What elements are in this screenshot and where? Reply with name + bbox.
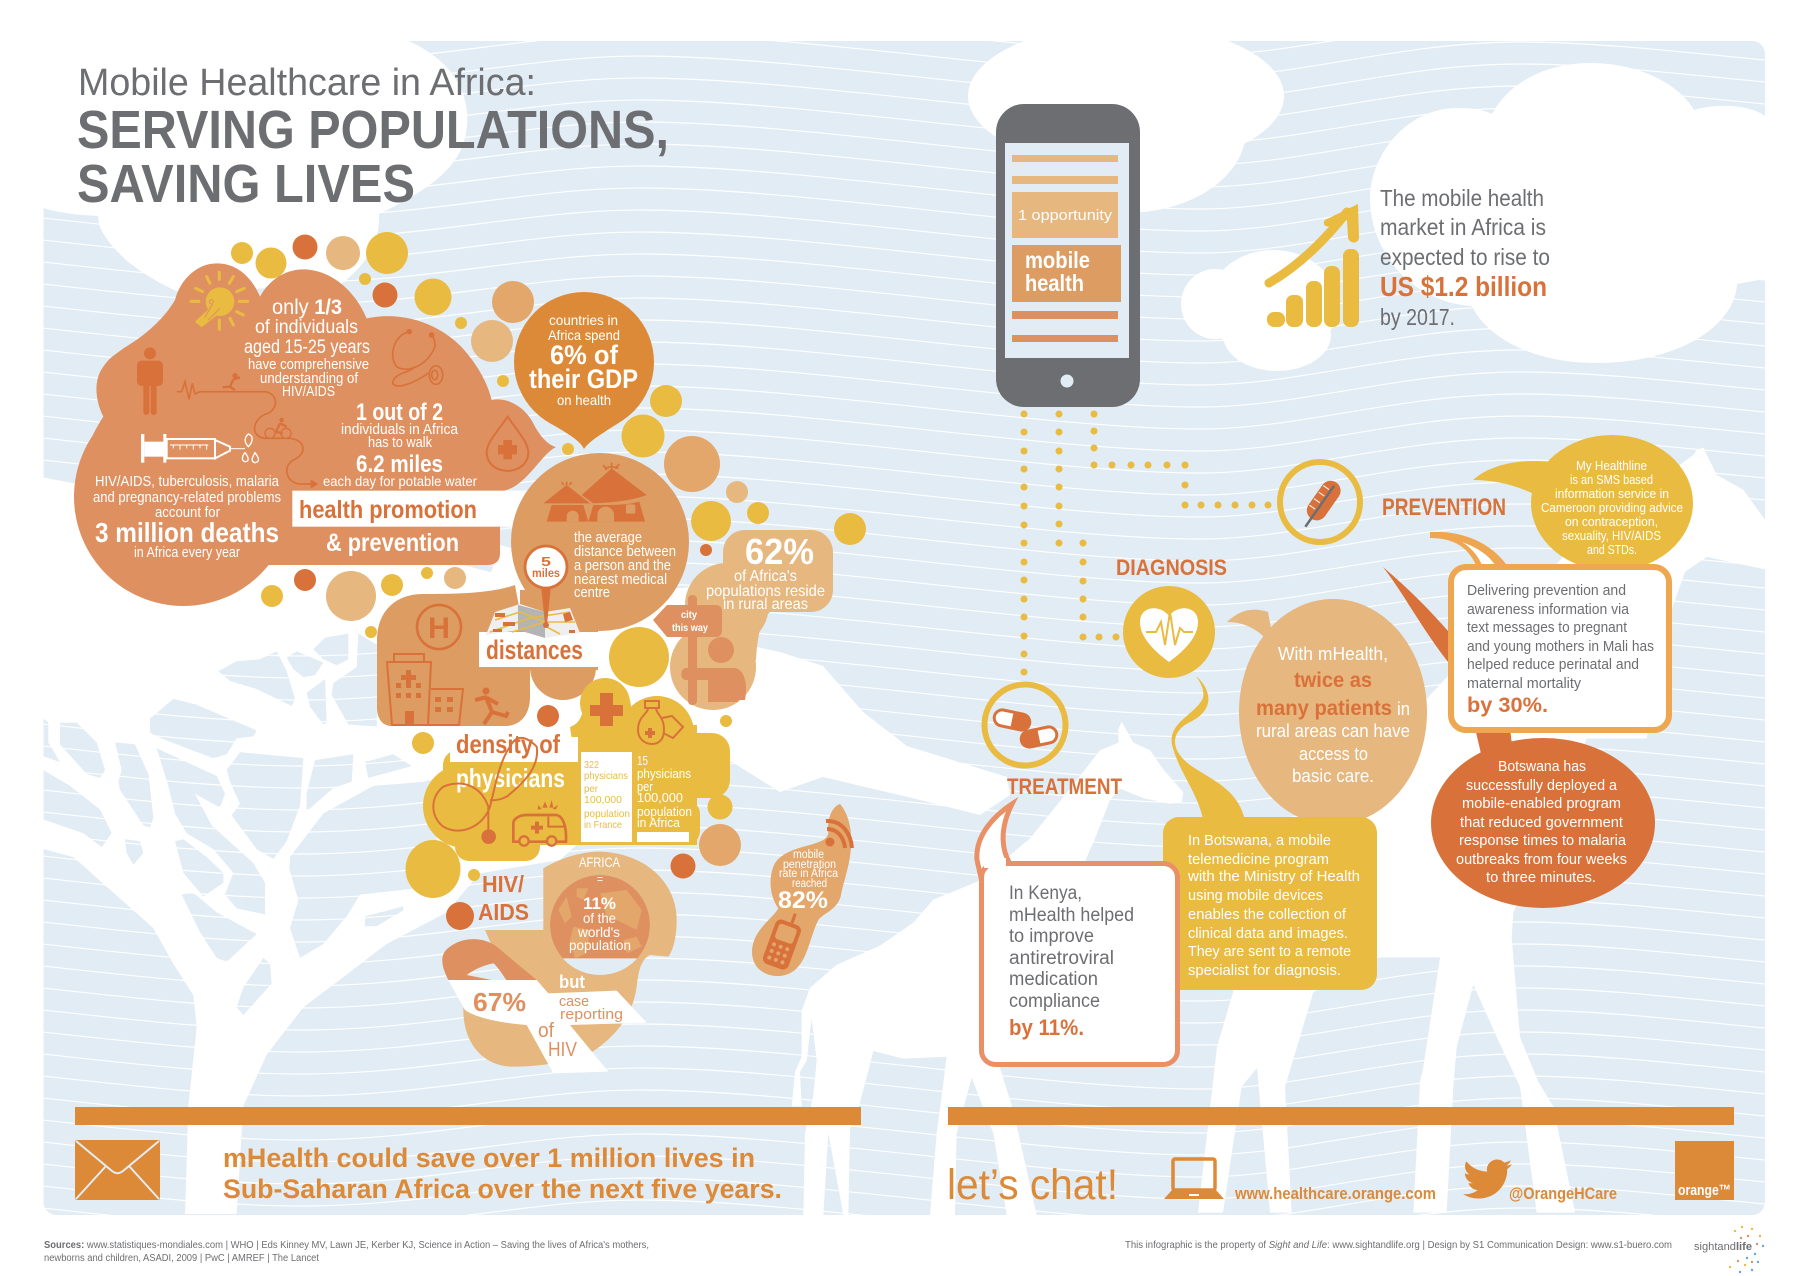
callout: twice as many patients: twice as <box>1294 669 1372 692</box>
stat: 322 physicians in France: 100,000 <box>584 794 622 806</box>
title <box>77 62 669 214</box>
icon: ambulance <box>513 800 566 846</box>
callout: twice as many patients <box>1227 599 1427 825</box>
panel: distances lobe <box>377 453 689 726</box>
text: 67 percent of HIV case reporting: 67% <box>473 987 526 1017</box>
label: mobile health: mobile <box>1025 247 1090 273</box>
stat: 15 physicians in Africa: population <box>637 805 692 819</box>
panel: mobile penetration <box>752 804 852 976</box>
icon: smartphone <box>996 104 1140 407</box>
callout: Mali prevention box: and young mothers in Mali has <box>1467 638 1654 655</box>
callout: My Healthline: sexuality, HIV/AIDS <box>1562 529 1661 543</box>
icon: hospital building <box>387 654 463 725</box>
text: market forecast: expected to rise to <box>1380 244 1550 270</box>
panel: density of physicians <box>423 678 730 861</box>
text: twitter handle: @OrangeHCare <box>1509 1185 1617 1203</box>
text: 3 million deaths: account for <box>155 505 220 521</box>
callout: 6 percent of GDP: 6% of <box>550 340 619 370</box>
text: 82 percent penetration rate: penetration <box>783 859 836 871</box>
heading: HIV/AIDS: AIDS <box>478 899 529 925</box>
heading: HIV/AIDS: HIV/ <box>482 871 525 897</box>
callout: Mali prevention box: text messages to pregnant <box>1467 619 1628 636</box>
text: 82 percent penetration rate: 82% <box>778 887 828 914</box>
title: SERVING POPULATIONS, <box>77 100 669 160</box>
heading: density of physicians <box>456 729 565 793</box>
callout: Kenya antiretroviral: antiretroviral <box>1009 948 1114 969</box>
panel: HIV/AIDS <box>442 852 677 1073</box>
icon: running person <box>475 688 508 724</box>
panel: 62 percent rural population: in rural areas <box>723 596 808 613</box>
label: mobile health: health <box>1025 270 1084 296</box>
icon: medical cross <box>590 693 623 726</box>
title: Mobile Healthcare in Africa: <box>78 62 536 104</box>
text: let's chat: let’s chat! <box>947 1161 1118 1209</box>
callout: Mali prevention box: awareness information via <box>1467 601 1630 618</box>
callout: Kenya antiretroviral <box>977 804 1178 1064</box>
callout: Botswana telemedicine: specialist for diagnosis. <box>1188 963 1341 979</box>
text: 82 percent penetration rate: reached <box>792 878 827 890</box>
text: mHealth could save over 1 million lives: Sub-Saharan Africa over the next five years. <box>223 1174 782 1204</box>
icon: heart in circle <box>1123 586 1215 678</box>
callout: My Healthline: on contraception, <box>1565 515 1658 529</box>
icon: walking route with runner and cyclist <box>177 373 318 489</box>
callout: twice as many patients: basic care. <box>1292 766 1374 786</box>
text: average distance: distance between <box>574 544 676 560</box>
callout: Kenya antiretroviral: mHealth helped <box>1009 905 1134 926</box>
stat: 15 physicians in Africa: 15 <box>637 754 648 768</box>
text: 67 percent of HIV case reporting: case <box>559 993 589 1010</box>
footer bar left <box>75 1107 861 1125</box>
text: market forecast: by 2017. <box>1380 304 1455 330</box>
callout: Kenya antiretroviral: compliance <box>1009 991 1100 1012</box>
sign: city this way: city <box>681 610 697 621</box>
icon: rising bar chart with arrow <box>1267 204 1359 327</box>
callout: 6 percent of GDP: on health <box>557 392 611 408</box>
icon: hospital sign: H <box>428 612 450 645</box>
panel: 62 percent rural population <box>653 530 833 710</box>
text: market forecast: The mobile health <box>1380 185 1544 211</box>
callout: twice as many patients: With mHealth, <box>1278 644 1388 664</box>
text: property and design credit: This infographic is the property of Sight and Life: www.sightandlife.org | Design by S1 Communication Design: www.s1-buero.com <box>1125 1240 1672 1251</box>
callout: Botswana malaria response: successfully deployed a <box>1466 777 1618 794</box>
icon: person <box>137 347 163 415</box>
callout: Botswana telemedicine: In Botswana, a mobile <box>1188 833 1331 849</box>
callout: Botswana malaria response: outbreaks from four weeks <box>1456 851 1627 868</box>
callout: Kenya antiretroviral: to improve <box>1009 926 1094 947</box>
sign: city this way: this way <box>672 623 708 634</box>
heading: diagnosis: DIAGNOSIS <box>1116 555 1227 580</box>
logo: sight and life: sightandlife <box>1694 1241 1752 1253</box>
text: sources <box>44 1240 649 1264</box>
text: mHealth could save over 1 million lives: mHealth could save over 1 million lives in <box>223 1143 755 1173</box>
stat: 15 physicians in Africa: in Africa <box>637 816 680 830</box>
callout: Botswana telemedicine: enables the collection of <box>1188 907 1347 923</box>
icon: 5 miles pin: 5 <box>541 554 551 569</box>
stat: 15 physicians in Africa: physicians <box>637 767 691 781</box>
text: Africa 11 percent of world population <box>569 854 631 953</box>
stat: 322 physicians in France <box>581 752 632 842</box>
panel: 62 percent rural population: 62% <box>745 531 814 572</box>
callout: My Healthline: Cameroon providing advice <box>1541 501 1683 515</box>
lobe shape <box>377 453 689 726</box>
icon: twitter bird <box>1463 1160 1512 1198</box>
text: one third of individuals: only 1/3 <box>272 296 342 319</box>
callout: Mali prevention box: by 30%. <box>1467 694 1548 717</box>
callout: Botswana telemedicine: They are sent to a remote <box>1188 944 1351 960</box>
text: 1 out of 2 walk 6.2 miles: 1 out of 2 <box>356 399 443 426</box>
heading: health promotion and prevention: health promotion <box>299 496 477 524</box>
stat: 322 physicians in France: physicians <box>584 770 628 782</box>
icon: signal waves <box>826 821 852 848</box>
text: 1 out of 2 walk 6.2 miles: has to walk <box>368 434 432 451</box>
heading: treatment: TREATMENT <box>1007 774 1122 799</box>
sign: city this way <box>653 605 722 637</box>
text: 3 million deaths <box>93 474 281 561</box>
lobe shape <box>423 678 730 861</box>
text: average distance: the average <box>574 530 642 546</box>
text: sources: Sources: www.statistiques-mondiales.com | WHO | Eds Kinney MV, Lawn JE, Kerber KJ, Science in Action – Saving the lives of Africa's mothers, <box>44 1240 649 1251</box>
callout: twice as many patients: rural areas can have <box>1256 721 1410 741</box>
icon: map <box>486 604 580 638</box>
text: Africa 11 percent of world population: AFRICA <box>579 854 621 870</box>
lobe shape <box>74 263 559 606</box>
giraffe silhouettes <box>792 447 1765 1215</box>
heading: health promotion and prevention: & prevention <box>326 529 459 557</box>
text: one third of individuals: HIV/AIDS <box>282 384 335 400</box>
shape <box>752 804 851 976</box>
text: 1 out of 2 walk 6.2 miles <box>323 399 477 489</box>
callout: Kenya antiretroviral: medication <box>1009 969 1098 990</box>
stat: 15 physicians in Africa <box>637 754 692 842</box>
callout: Botswana telemedicine: telemedicine program <box>1188 852 1329 868</box>
callout: Botswana malaria response: that reduced government <box>1460 814 1624 831</box>
callout: Botswana malaria response: to three minutes. <box>1486 869 1596 886</box>
text: one third of individuals <box>244 296 370 400</box>
callout: Botswana telemedicine <box>1163 676 1377 990</box>
panel: 62 percent rural population: of Africa's <box>734 568 797 585</box>
text: one third of individuals: of individuals <box>255 317 358 338</box>
callout: My Healthline: is an SMS based <box>1570 473 1653 487</box>
icon: huts <box>543 463 647 522</box>
callout: twice as many patients: access to <box>1299 744 1368 764</box>
text: website: www.healthcare.orange.com <box>1234 1185 1436 1203</box>
callout: 6 percent of GDP: Africa spend <box>548 327 620 343</box>
footer bar right <box>948 1107 1734 1125</box>
icon: hospital sign <box>417 605 461 649</box>
callout: Botswana malaria response <box>1383 567 1655 908</box>
text: market forecast <box>1380 185 1550 330</box>
text: 67 percent of HIV case reporting: HIV <box>548 1039 578 1061</box>
icon: stethoscope <box>433 738 537 844</box>
logo: orange <box>1675 1141 1734 1200</box>
text: 67 percent of HIV case reporting: reporting <box>560 1006 623 1023</box>
icon: mobile phone <box>761 908 806 971</box>
heading: distances: distances <box>486 635 583 665</box>
text: Africa 11 percent of world population: = <box>597 872 603 886</box>
callout: twice as many patients: in <box>1397 699 1410 719</box>
icon: stethoscope <box>393 330 443 386</box>
heading: HIV/AIDS <box>478 871 529 925</box>
panel: health promotion and prevention lobe <box>74 263 559 606</box>
text: one third of individuals: have comprehensive <box>248 357 369 373</box>
text: 82 percent penetration rate <box>778 849 839 914</box>
callout: Botswana telemedicine: clinical data and images. <box>1188 926 1348 942</box>
icon: water drop with cross <box>487 417 528 471</box>
heading: health promotion and prevention <box>299 496 477 557</box>
text: market forecast: US $1.2 billion <box>1380 271 1547 302</box>
label: 1 opportunity <box>1012 192 1118 238</box>
callout: Botswana telemedicine: with the Ministry of Health <box>1187 869 1360 885</box>
lobe shape <box>670 530 833 710</box>
stat: 322 physicians in France: in France <box>584 819 622 831</box>
callout: My Healthline: information service in <box>1555 487 1669 501</box>
callout: Mali prevention box: helped reduce perinatal and <box>1467 656 1639 673</box>
text: sources: newborns and children, ASADI, 2009 | PwC | AMREF | The Lancet <box>44 1253 319 1264</box>
stat: 322 physicians in France: 322 <box>584 759 599 771</box>
callout: Mali prevention box: Delivering prevention and <box>1467 582 1626 599</box>
text: 82 percent penetration rate: mobile <box>793 849 824 861</box>
icon: pills in circle <box>984 684 1066 766</box>
logo: orange: orange™ <box>1678 1182 1731 1199</box>
callout: Kenya antiretroviral: by 11%. <box>1009 1015 1084 1040</box>
heading: density of physicians: density of <box>456 729 560 759</box>
text: 1 out of 2 walk 6.2 miles: individuals in Africa <box>341 421 459 438</box>
text: 3 million deaths: and pregnancy-related problems <box>93 490 281 506</box>
icon: laptop <box>1164 1159 1224 1199</box>
text: market forecast: market in Africa is <box>1380 214 1546 240</box>
callout: twice as many patients: many patients <box>1256 697 1392 720</box>
icon: 5 miles pin <box>525 546 567 628</box>
heading: prevention: PREVENTION <box>1382 494 1506 521</box>
icon: light bulb <box>191 272 248 329</box>
text: Africa 11 percent of world population: world's <box>577 924 620 940</box>
text: 3 million deaths: 3 million deaths <box>95 517 279 548</box>
icon: globe <box>550 875 650 975</box>
text: average distance: centre <box>574 585 610 601</box>
clouds <box>0 0 1770 371</box>
stat: 322 physicians in France: per <box>584 783 598 795</box>
text: average distance: a person and the <box>574 558 671 574</box>
stat: 322 physicians in France: population <box>584 808 630 820</box>
callout: Mali prevention box: maternal mortality <box>1467 675 1581 692</box>
icon: syringe <box>141 434 259 463</box>
text: 3 million deaths: HIV/AIDS, tuberculosis, malaria <box>95 474 280 490</box>
text: average distance <box>574 530 676 601</box>
callout: Botswana malaria response: mobile-enabled program <box>1462 795 1621 812</box>
callout: Botswana telemedicine: using mobile devices <box>1188 888 1323 904</box>
callout: Botswana malaria response: response times to malaria <box>1459 832 1627 849</box>
callout: My Healthline <box>1473 435 1693 571</box>
text: Africa 11 percent of world population: 11% <box>583 894 616 913</box>
text: 67 percent of HIV case reporting: of <box>538 1020 554 1042</box>
tree silhouette <box>43 477 1010 1214</box>
icon: thermometer in circle <box>1280 462 1360 542</box>
logo: sight and life <box>1694 1226 1764 1273</box>
text: Africa 11 percent of world population: population <box>569 937 631 953</box>
dotted connectors <box>1020 410 1272 676</box>
callout: 6 percent of GDP <box>514 292 654 449</box>
text: 82 percent penetration rate: rate in Africa <box>779 868 839 880</box>
text: mHealth could save over 1 million lives <box>223 1143 782 1204</box>
icon: person with sign post <box>681 595 746 705</box>
callout: My Healthline: and STDs. <box>1587 543 1637 557</box>
text: 3 million deaths: in Africa every year <box>134 545 240 561</box>
text: one third of individuals: aged 15-25 years <box>244 337 370 358</box>
panel: 62 percent rural population: populations reside <box>706 583 825 600</box>
callout: 6 percent of GDP: countries in <box>549 312 618 328</box>
stat: 15 physicians in Africa: per <box>637 780 653 794</box>
callout: 6 percent of GDP: their GDP <box>529 364 638 394</box>
text: Africa 11 percent of world population: of the <box>583 910 616 926</box>
callout: My Healthline: My Healthline <box>1576 459 1647 473</box>
lobe shape <box>463 852 677 1067</box>
icon: medicine bottle <box>638 701 683 744</box>
label: mobile health <box>1012 245 1121 302</box>
text: 1 out of 2 walk 6.2 miles: 6.2 miles <box>356 451 443 478</box>
icon: envelope <box>75 1140 160 1200</box>
stat: 15 physicians in Africa: 100,000 <box>637 791 683 805</box>
icon: 5 miles pin: miles <box>532 566 560 580</box>
text: one third of individuals: understanding of <box>260 371 359 387</box>
callout: Botswana malaria response: Botswana has <box>1498 758 1586 775</box>
text: 1 out of 2 walk 6.2 miles: each day for potable water <box>323 473 477 489</box>
label: 1 opportunity: 1 opportunity <box>1018 207 1113 224</box>
callout: Mali prevention box <box>1430 532 1669 730</box>
icon: awareness ribbon <box>442 939 647 1073</box>
text: average distance: nearest medical <box>574 572 667 588</box>
callout: Kenya antiretroviral: In Kenya, <box>1009 883 1082 904</box>
title: SAVING LIVES <box>77 154 415 214</box>
decorative bubbles around Africa <box>231 232 866 930</box>
heading: density of physicians: physicians <box>456 763 565 793</box>
text: 67 percent of HIV case reporting: but <box>559 972 585 992</box>
text: 67 percent of HIV case reporting <box>473 972 623 1061</box>
